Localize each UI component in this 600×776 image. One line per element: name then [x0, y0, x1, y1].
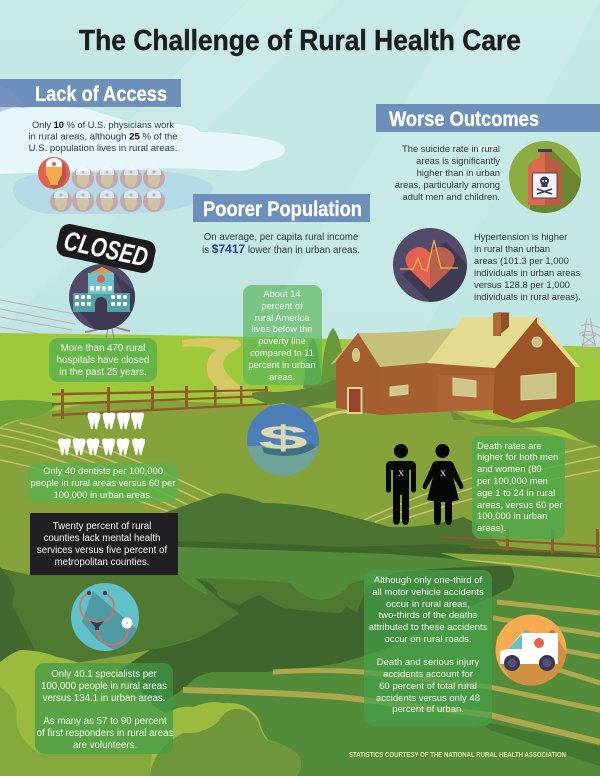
callout: specialists: 100,000 people in rural areas	[41, 681, 167, 692]
bush beside house	[252, 380, 350, 408]
icon: skull	[537, 176, 552, 194]
callout: poverty line: rural America	[255, 313, 310, 323]
icon: poison bottle	[509, 141, 581, 213]
icon: man and woman: X	[440, 469, 446, 478]
callout: specialists: of first responders in rural areas	[37, 728, 174, 739]
trees	[303, 328, 346, 392]
callout: dentists: people in rural areas versus 60 per	[31, 477, 175, 488]
icon: man and woman: X	[398, 469, 404, 478]
text: hypertension: areas (101.3 per 1,000	[474, 255, 569, 266]
road stripes lower right	[183, 602, 600, 742]
clouds	[0, 95, 500, 214]
callout: death rates: and women (80	[477, 463, 542, 474]
icon: dollar sign: $	[258, 420, 308, 456]
callout: motor vehicle accidents: Although only one-third of	[374, 575, 482, 586]
left wing wall	[336, 333, 380, 415]
dark hill ridge	[140, 493, 600, 566]
callout: specialists: versus 134.1 in urban areas.	[43, 693, 165, 704]
text: hypertension: Hypertension is higher	[474, 231, 567, 242]
heading: worse outcomes	[376, 104, 600, 132]
heading: worse outcomes: Worse Outcomes	[389, 108, 539, 131]
icon: teeth	[58, 412, 145, 455]
panel: dentists	[28, 412, 178, 502]
icon: man and woman	[386, 444, 463, 525]
text: physicians: in rural areas, although 25 % of the	[28, 132, 178, 142]
callout: mental health	[30, 513, 178, 575]
callout: poverty line: lives below the	[252, 324, 312, 334]
left lower hill	[0, 568, 240, 665]
text: suicide rate: areas is significantly	[416, 155, 500, 166]
field stripes	[0, 423, 600, 522]
middle hill	[200, 578, 370, 620]
callout: specialists: are volunteers.	[73, 740, 137, 751]
callout: rural hospitals closed: in the past 25 years.	[59, 367, 147, 378]
callout: death rates: Death rates are	[477, 440, 542, 451]
title: The Challenge of Rural Health Care	[79, 25, 521, 57]
back roof	[358, 328, 455, 367]
text: suicide rate: The suicide rate in rural	[402, 143, 500, 154]
bush in front of house	[450, 400, 600, 447]
callout: motor vehicle accidents: percent of urban.	[392, 704, 464, 715]
callout: death rates: age 1 to 24 in rural	[477, 487, 555, 498]
text: hypertension: versus 128.8 per 1,000	[474, 279, 570, 290]
callout: poverty line: compared to 11	[250, 348, 314, 358]
lower meadow	[150, 546, 600, 776]
dark river valley	[120, 566, 514, 702]
house	[330, 312, 580, 420]
callout: death rates: 100,000 in urban	[477, 510, 547, 521]
callout: mental health: services versus five percent of	[37, 545, 167, 556]
callout: death rates	[472, 436, 565, 539]
right pylon	[579, 318, 600, 356]
left pylon	[85, 326, 130, 382]
callout: motor vehicle accidents: occur in rural areas,	[386, 599, 470, 610]
callout: motor vehicle accidents	[364, 570, 492, 726]
callout: specialists	[35, 663, 174, 754]
callout: rural hospitals closed: hospitals have closed	[57, 355, 149, 366]
icon: dollar sign	[247, 404, 319, 478]
yellow road	[182, 338, 252, 394]
callout: mental health: metropolitan counties.	[55, 557, 149, 568]
callout: specialists: As many as 57 to 90 percent	[43, 716, 167, 727]
callout: motor vehicle accidents: Death and serious injury	[377, 657, 479, 668]
path to door	[313, 411, 352, 422]
windows	[390, 385, 408, 396]
main roof	[427, 317, 537, 368]
callout: poverty line: percent of	[261, 301, 303, 311]
icon: ambulance	[496, 614, 566, 686]
callout: rural hospitals closed	[49, 338, 157, 382]
panel: poorer population	[193, 194, 370, 478]
text: rural income: is $7417 lower than in urban areas.	[202, 242, 360, 256]
callout: motor vehicle accidents: occur on rural roads.	[384, 634, 472, 645]
text: hypertension: individuals in urban areas	[474, 267, 581, 278]
door	[348, 388, 362, 413]
attic window	[352, 348, 360, 362]
olive hillside	[0, 400, 600, 776]
callout: death rates: higher for both men	[477, 451, 558, 462]
icon: hospital	[69, 264, 135, 330]
callout: motor vehicle accidents: all motor vehicle accidents	[372, 587, 484, 598]
callout: death rates: per 100,000 men	[477, 475, 548, 486]
text: suicide rate: areas, particularly among	[395, 179, 500, 190]
panel: lack of access	[0, 79, 181, 212]
callout: motor vehicle accidents: accidents account for	[383, 669, 473, 680]
bright bush bottom left	[0, 650, 301, 776]
callout: rural hospitals closed: More than 470 rural	[61, 343, 145, 354]
right fence	[440, 529, 600, 556]
heading: lack of access: Lack of Access	[35, 83, 167, 106]
callout: poverty line: poverty line	[258, 336, 306, 346]
left bush	[0, 400, 57, 427]
icon: closed sign: CLOSED	[61, 225, 151, 273]
icon: heart rate	[393, 228, 472, 305]
text: suicide rate: adult men and children.	[403, 191, 500, 202]
right olive strip	[440, 553, 600, 577]
callout: specialists: Only 40.1 specialists per	[51, 669, 158, 680]
callout: motor vehicle accidents: attributed to these accidents	[369, 622, 488, 633]
bay	[437, 375, 497, 412]
light green field	[0, 333, 600, 776]
icon: closed sign	[55, 222, 157, 275]
chimney	[493, 312, 501, 336]
callout: motor vehicle accidents: 60 percent of total rural	[379, 681, 477, 692]
callout: dentists: Only 40 dentists per 100,000	[43, 465, 163, 476]
power lines left	[0, 300, 80, 334]
callout: motor vehicle accidents: two-thirds of the deaths	[379, 610, 478, 621]
callout: death rates: areas).	[477, 522, 506, 533]
callout: dentists	[28, 463, 178, 502]
callout: motor vehicle accidents: accidents versus only 48	[376, 693, 480, 704]
heading: poorer population: Poorer Population	[203, 198, 362, 221]
callout: poverty line: percent in urban	[248, 360, 316, 370]
icon: stethoscope	[71, 583, 140, 655]
main gable	[493, 317, 575, 420]
left fence	[52, 386, 268, 419]
middle wall	[380, 363, 495, 415]
source note: STATISTICS COURTESY OF THE NATIONAL RURAL HEALTH ASSOCIATION	[349, 752, 566, 759]
icon: nine faded doctors	[50, 167, 165, 212]
text: physicians: U.S. population lives in rural areas.	[29, 143, 177, 154]
panel: worse outcomes	[349, 104, 600, 759]
text: hypertension: in rural than urban	[474, 243, 550, 254]
callout: mental health: counties lack mental health	[44, 533, 160, 544]
icon: one of ten doctors	[38, 157, 70, 190]
sky rays	[0, 0, 600, 340]
callout: poverty line: About 14	[263, 289, 301, 299]
callout: dentists: 100,000 in urban areas.	[53, 489, 153, 500]
callout: poverty line: areas.	[269, 372, 295, 382]
callout: death rates: areas, versus 60 per	[477, 499, 562, 510]
text: suicide rate: higher than in urban	[417, 167, 500, 178]
text: physicians: Only 10 % of U.S. physicians work	[32, 120, 174, 130]
callout: poverty line	[243, 285, 322, 385]
text: hypertension: individuals in rural areas).	[474, 291, 581, 302]
text: rural income: On average, per capita rural income	[204, 232, 358, 243]
callout: mental health: Twenty percent of rural	[53, 521, 151, 532]
panel: hospitals	[49, 222, 157, 382]
heading: lack of access	[0, 79, 181, 107]
